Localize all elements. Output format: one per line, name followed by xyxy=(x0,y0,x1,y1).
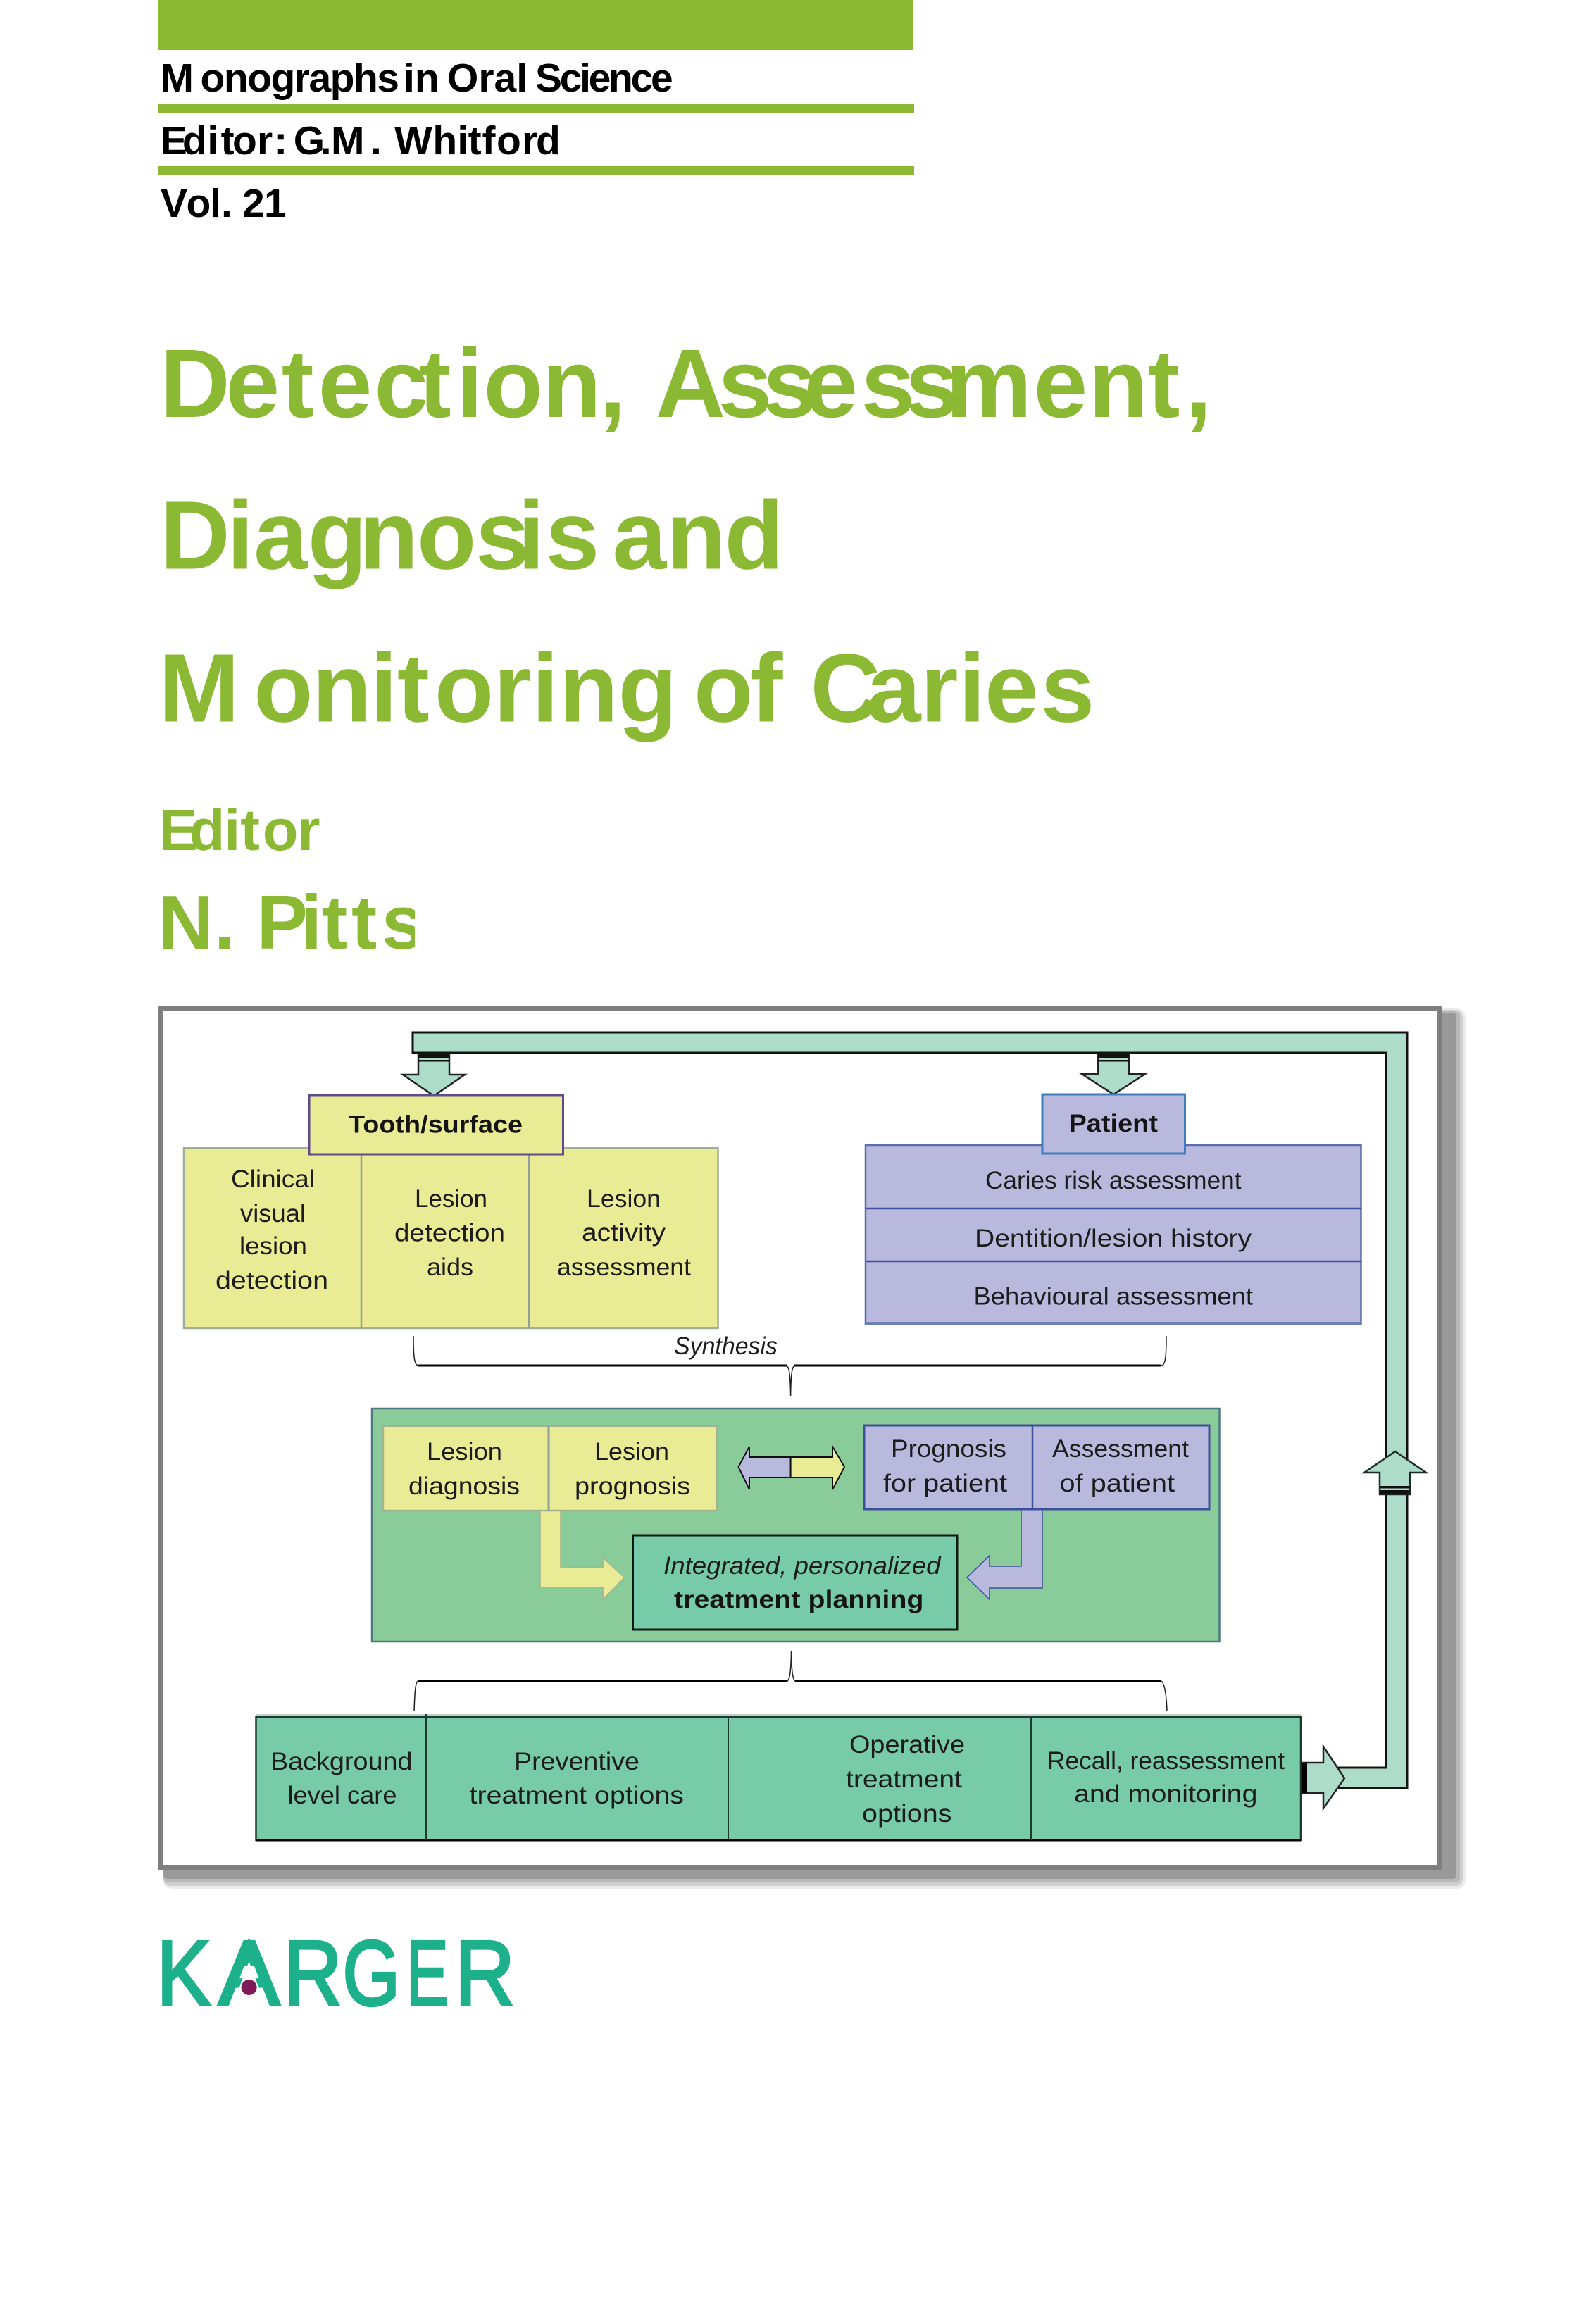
logo: Karger: R xyxy=(455,1922,515,2025)
arrow: into loop from recall xyxy=(1302,1747,1344,1808)
series title: M xyxy=(161,56,194,101)
text: operative treatment options xyxy=(846,1731,965,1828)
text: background level care xyxy=(270,1748,413,1809)
arrow: up on loop xyxy=(1364,1451,1426,1494)
box: integrated treatment planning: treatment planning xyxy=(674,1586,924,1613)
arrow: two-way exchange xyxy=(738,1447,844,1489)
logo: Karger: R xyxy=(283,1922,342,2025)
cells: patient prognosis and assessment: of patient xyxy=(1059,1470,1175,1497)
text: lesion activity assessment: Lesion xyxy=(587,1185,661,1213)
series title: Science xyxy=(535,56,672,101)
cells: patient prognosis and assessment: Assessment xyxy=(1052,1435,1189,1463)
text: lesion detection aids: Lesion xyxy=(415,1185,487,1213)
heading: patient xyxy=(1042,1094,1185,1154)
cells: patient prognosis and assessment: Prognosis xyxy=(891,1435,1006,1463)
text: lesion activity assessment xyxy=(557,1185,691,1281)
series title: onographs xyxy=(200,56,399,101)
cells: lesion diagnosis and prognosis: prognosis xyxy=(575,1473,690,1500)
text: preventive treatment options: treatment options xyxy=(469,1782,684,1809)
text: dentition/lesion history: Dentition/lesion history xyxy=(975,1225,1252,1252)
series rule top xyxy=(158,104,914,113)
series title: in xyxy=(404,56,439,101)
panel: patient body xyxy=(866,1145,1361,1325)
arrow: feedback loop band xyxy=(413,1032,1407,1788)
text: background level care: level care xyxy=(287,1782,397,1809)
heading: tooth/surface: Tooth/surface xyxy=(349,1111,523,1138)
text: preventive treatment options xyxy=(469,1748,684,1809)
label: synthesis: Synthesis xyxy=(674,1332,778,1360)
panel: integrated planning background xyxy=(372,1408,1220,1642)
series editor: Editor: G.M . Whitford xyxy=(161,118,561,163)
text: recall, reassessment and monitoring: Recall, reassessment xyxy=(1047,1747,1285,1775)
text: clinical visual lesion detection: detection xyxy=(216,1267,328,1294)
logo: Karger: E xyxy=(406,1922,448,2025)
arrow: down to patient xyxy=(1082,1054,1145,1094)
cells: lesion diagnosis and prognosis xyxy=(383,1426,717,1511)
text: clinical visual lesion detection: Clinical xyxy=(231,1166,315,1193)
text: clinical visual lesion detection xyxy=(216,1166,328,1294)
logo: Karger: A xyxy=(218,1921,280,2025)
cells: lesion diagnosis and prognosis: diagnosis xyxy=(408,1473,520,1500)
book title xyxy=(158,330,1212,742)
cells: lesion diagnosis and prognosis: Lesion xyxy=(427,1438,502,1466)
logo: Karger: G xyxy=(342,1923,400,2025)
arrow: down to tooth/surface xyxy=(403,1054,465,1096)
book title: Monitoring of Caries xyxy=(158,634,1094,742)
text: recall, reassessment and monitoring: and monitoring xyxy=(1074,1780,1258,1808)
logo: Karger: K xyxy=(156,1922,211,2025)
row: treatment options xyxy=(256,1714,1301,1840)
header band xyxy=(158,0,913,50)
cells: patient prognosis and assessment: for patient xyxy=(883,1470,1007,1497)
text: lesion activity assessment: assessment xyxy=(557,1254,691,1281)
panel: tooth/surface body xyxy=(184,1148,718,1328)
cells: lesion diagnosis and prognosis: Lesion xyxy=(594,1438,669,1466)
text: operative treatment options: options xyxy=(862,1800,952,1828)
brace: synthesis xyxy=(413,1336,1166,1396)
text: clinical visual lesion detection: lesion xyxy=(239,1232,307,1260)
arrow: yellow to treatment planning xyxy=(540,1511,625,1599)
text: operative treatment options: Operative xyxy=(849,1731,965,1758)
text: lesion detection aids xyxy=(394,1185,505,1281)
text: clinical visual lesion detection: visual xyxy=(240,1200,306,1227)
editor name: N. Pitts xyxy=(158,880,424,966)
text: lesion activity assessment: activity xyxy=(582,1219,666,1247)
text: preventive treatment options: Preventive xyxy=(514,1748,639,1775)
series title: Oral xyxy=(447,56,528,101)
text: recall, reassessment and monitoring xyxy=(1047,1747,1285,1808)
editor label: Editor xyxy=(158,797,320,863)
brace: treatment options xyxy=(414,1651,1167,1711)
cells: patient prognosis and assessment xyxy=(864,1425,1209,1509)
box: integrated treatment planning: Integrated, personalized xyxy=(663,1552,942,1580)
text: caries risk assessment: Caries risk assessment xyxy=(985,1167,1242,1194)
text: lesion detection aids: detection xyxy=(394,1220,505,1247)
volume number: Vol. 21 xyxy=(161,181,287,226)
text: background level care: Background xyxy=(270,1748,413,1775)
heading: tooth/surface xyxy=(309,1095,563,1154)
book title: Detection, Assessment, xyxy=(160,330,1212,438)
text: behavioural assessment: Behavioural assessment xyxy=(973,1283,1253,1310)
text: operative treatment options: treatment xyxy=(846,1766,962,1793)
text: lesion detection aids: aids xyxy=(427,1254,473,1281)
arrow: purple to treatment planning xyxy=(967,1509,1042,1599)
box: integrated treatment planning xyxy=(632,1535,957,1630)
book title: Diagnosis and xyxy=(160,482,784,590)
heading: patient: Patient xyxy=(1069,1110,1158,1137)
series rule bottom xyxy=(158,166,914,175)
logo: Karger xyxy=(156,1921,515,2025)
panel: flowchart xyxy=(161,1008,1466,1889)
